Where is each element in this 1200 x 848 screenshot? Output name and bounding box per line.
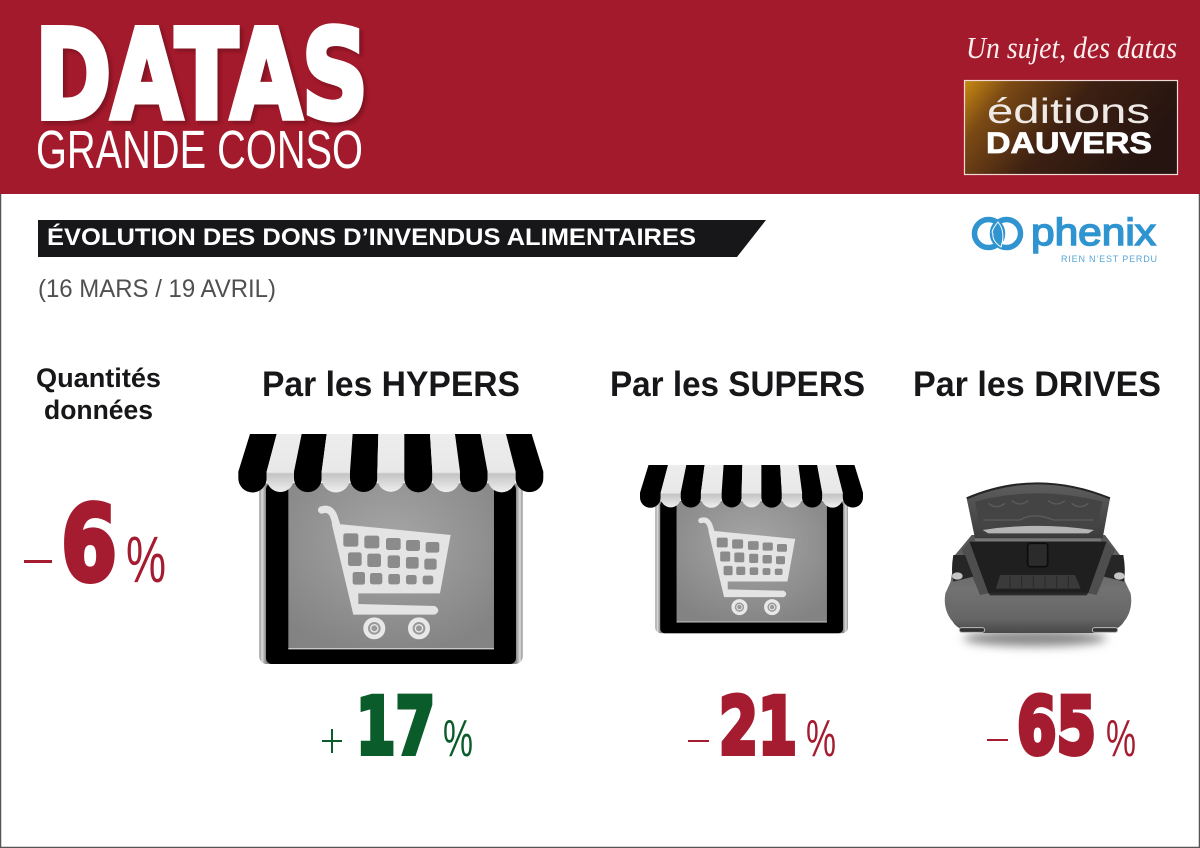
panel: supers	[610, 365, 865, 772]
logo: phenix: phenix	[1031, 212, 1156, 254]
title: GRANDE CONSO: GRANDE CONSO	[36, 120, 363, 180]
tagline: Un sujet, des datas	[966, 30, 1177, 65]
value: 65	[1017, 682, 1096, 772]
heading: Quantités données: données	[44, 395, 153, 425]
value: %	[1106, 710, 1136, 768]
section banner: ÉVOLUTION DES DONS D’INVENDUS ALIMENTAIRES	[47, 223, 696, 251]
value	[24, 483, 166, 605]
logo: éditions Dauvers: DAUVERS	[986, 127, 1152, 160]
header band	[0, 0, 1200, 194]
logo: phenix	[974, 212, 1157, 264]
logo: éditions Dauvers: éditions	[987, 92, 1150, 131]
icon: shop with cart	[238, 434, 543, 664]
value: 17	[356, 682, 435, 772]
panel: hypers	[238, 365, 543, 772]
value: 6	[61, 483, 117, 605]
heading: Par les SUPERS	[610, 365, 865, 404]
panel: drives	[913, 365, 1161, 772]
heading: Par les HYPERS	[262, 365, 520, 404]
value: 21	[719, 682, 797, 772]
heading: Quantités données: Quantités	[36, 363, 161, 393]
icon: shop with cart	[640, 465, 863, 633]
value: %	[806, 710, 836, 768]
value: %	[126, 522, 166, 596]
title: DATAS: DATAS	[35, 5, 368, 148]
date range: (16 MARS / 19 AVRIL)	[38, 275, 276, 303]
heading: Par les DRIVES	[913, 365, 1161, 404]
logo: éditions Dauvers	[964, 80, 1178, 174]
section banner	[38, 220, 766, 257]
heading: Quantités données	[36, 363, 161, 425]
value: %	[443, 710, 473, 768]
title: DATAS: DATAS	[38, 8, 371, 151]
logo: phenix: RIEN N’EST PERDU	[1061, 254, 1157, 264]
panel: quantités données	[24, 363, 166, 605]
icon: car with open boot	[945, 483, 1131, 646]
